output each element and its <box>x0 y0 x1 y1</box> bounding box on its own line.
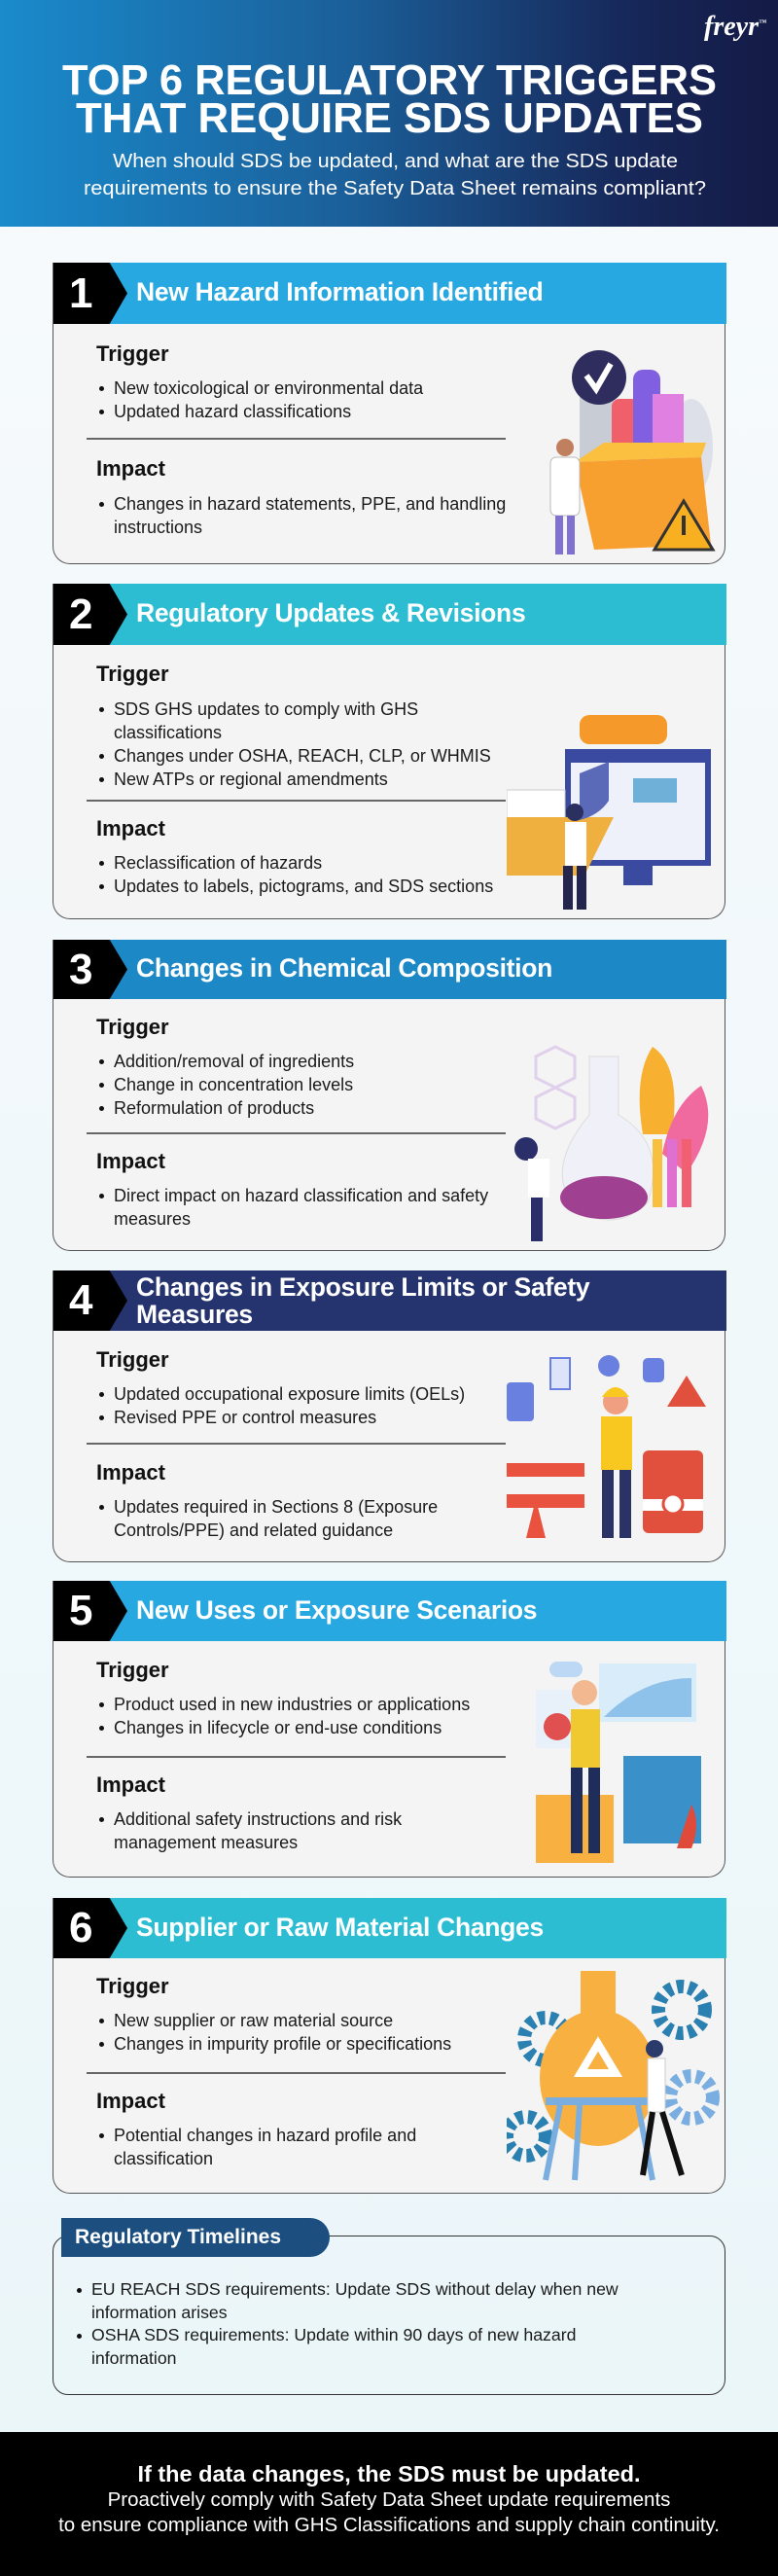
impact bullets <box>99 1186 488 1229</box>
trigger bullets <box>99 1695 470 1737</box>
impact bullets: Reclassification of hazards <box>114 853 322 873</box>
panel 1: new hazard information <box>53 263 725 564</box>
impact bullets: classification <box>114 2149 213 2168</box>
illustration: flask with recycle symbol and gears <box>507 1971 720 2181</box>
panel: regulatory timelines <box>53 2218 725 2395</box>
impact bullets: Updates required in Sections 8 (Exposure <box>114 1497 438 1517</box>
trigger label: Trigger <box>96 1015 169 1039</box>
title: When should SDS be updated, and what are the SDS update <box>113 151 678 172</box>
panel 1 header: 1 <box>69 268 92 317</box>
impact bullets: instructions <box>114 518 202 537</box>
footer text: Proactively comply with Safety Data Sheet update requirements <box>108 2488 670 2511</box>
trigger bullets: Addition/removal of ingredients <box>114 1052 354 1071</box>
timelines bullets: EU REACH SDS requirements: Update SDS without delay when new <box>91 2279 619 2299</box>
panel 5: new uses <box>53 1581 725 1878</box>
trigger bullets: Updated hazard classifications <box>114 402 351 421</box>
trigger bullets: New supplier or raw material source <box>114 2011 393 2030</box>
panel 6: supplier changes <box>53 1898 725 2194</box>
panel 6 header: 6 <box>69 1904 92 1951</box>
timelines bullets: information arises <box>91 2303 228 2322</box>
timelines tab heading <box>61 2218 330 2257</box>
impact label: Impact <box>96 1149 165 1173</box>
panel 5 header <box>53 1581 726 1641</box>
impact label: Impact <box>96 816 165 841</box>
trigger bullets: Changes in lifecycle or end-use conditions <box>114 1718 442 1737</box>
trigger label: Trigger <box>96 1347 169 1372</box>
impact bullets: Additional safety instructions and risk <box>114 1809 402 1829</box>
impact label: Impact <box>96 456 165 481</box>
impact bullets <box>99 1497 438 1540</box>
trigger bullets: Revised PPE or control measures <box>114 1408 376 1427</box>
footer text: to ensure compliance with GHS Classifications and supply chain continuity. <box>58 2514 720 2536</box>
trigger bullets <box>99 699 491 789</box>
panel 2 header <box>53 584 726 645</box>
trigger bullets: Reformulation of products <box>114 1098 314 1118</box>
impact label: Impact <box>96 1460 165 1485</box>
panel 5 header: 5 <box>69 1587 92 1634</box>
impact label: Impact <box>96 1772 165 1797</box>
impact bullets <box>99 853 493 896</box>
illustration: safety worker with barrier and first-aid kit <box>507 1355 706 1538</box>
panel 4 header: Measures <box>136 1300 253 1329</box>
impact bullets: Updates to labels, pictograms, and SDS sections <box>114 877 493 896</box>
panel 2 header: 2 <box>69 590 92 638</box>
impact bullets <box>99 2126 416 2168</box>
illustration: flask, plants, test tubes <box>514 1045 708 1241</box>
trigger bullets: Updated occupational exposure limits (OELs) <box>114 1384 465 1404</box>
trigger bullets <box>99 1384 465 1427</box>
trigger bullets: classifications <box>114 723 222 742</box>
panel 2: regulatory updates <box>53 584 725 919</box>
trigger bullets: SDS GHS updates to comply with GHS <box>114 699 418 719</box>
impact bullets: management measures <box>114 1833 298 1852</box>
trigger bullets <box>99 378 424 421</box>
title: requirements to ensure the Safety Data Sheet remains compliant? <box>84 178 706 199</box>
illustration: monitor with shield and person <box>507 715 711 910</box>
trigger bullets: Change in concentration levels <box>114 1075 353 1094</box>
panel 4 header <box>53 1270 726 1331</box>
trigger bullets: Changes in impurity profile or specifications <box>114 2034 451 2054</box>
timelines bullets <box>77 2279 619 2368</box>
trigger label: Trigger <box>96 1974 169 1998</box>
impact bullets: Potential changes in hazard profile and <box>114 2126 416 2145</box>
trigger bullets <box>99 1052 354 1118</box>
timelines tab heading: Regulatory Timelines <box>75 2226 281 2248</box>
trigger bullets: Product used in new industries or applications <box>114 1695 470 1714</box>
impact bullets <box>99 1809 403 1852</box>
trigger bullets: New ATPs or regional amendments <box>114 769 388 789</box>
logo: freyr: freyr™ <box>704 12 766 42</box>
footer headline: If the data changes, the SDS must be updated. <box>137 2461 641 2487</box>
panel 6 header: Supplier or Raw Material Changes <box>136 1913 544 1942</box>
title <box>62 56 717 199</box>
impact label: Impact <box>96 2089 165 2113</box>
trigger bullets <box>99 2011 451 2054</box>
impact bullets: Changes in hazard statements, PPE, and handling <box>114 494 506 514</box>
trigger label: Trigger <box>96 662 169 686</box>
panel 1 header <box>53 263 726 324</box>
header banner <box>0 0 778 227</box>
trigger bullets: New toxicological or environmental data <box>114 378 423 398</box>
title: THAT REQUIRE SDS UPDATES <box>76 94 703 142</box>
panel 3 header <box>53 940 726 999</box>
impact bullets: Controls/PPE) and related guidance <box>114 1521 393 1540</box>
panel 3: chemical composition <box>53 940 725 1251</box>
panel 3 header: 3 <box>69 946 92 992</box>
panel 5 header: New Uses or Exposure Scenarios <box>136 1595 537 1625</box>
panel 6 header <box>53 1898 726 1958</box>
trigger bullets: Changes under OSHA, REACH, CLP, or WHMIS <box>114 746 491 766</box>
impact bullets <box>99 494 506 537</box>
footer <box>0 2432 778 2576</box>
panel 1 header: New Hazard Information Identified <box>136 277 544 306</box>
title: TOP 6 REGULATORY TRIGGERS <box>62 56 717 104</box>
impact bullets: Direct impact on hazard classification and safety <box>114 1186 488 1205</box>
illustration: box of chemicals with scientist <box>550 350 716 555</box>
panel 3 header: Changes in Chemical Composition <box>136 953 552 983</box>
impact bullets: measures <box>114 1209 191 1229</box>
footer text <box>58 2488 720 2536</box>
panel 4 header: 4 <box>69 1276 92 1324</box>
panel 4: exposure limits <box>53 1270 725 1562</box>
panel 2 header: Regulatory Updates & Revisions <box>136 598 525 627</box>
trigger label: Trigger <box>96 1658 169 1682</box>
illustration: presenter with dashboards <box>536 1662 701 1863</box>
timelines bullets: OSHA SDS requirements: Update within 90 days of new hazard <box>91 2325 576 2344</box>
trigger label: Trigger <box>96 341 169 366</box>
timelines bullets: information <box>91 2348 177 2368</box>
panel 4 header: Changes in Exposure Limits or Safety <box>136 1272 589 1302</box>
